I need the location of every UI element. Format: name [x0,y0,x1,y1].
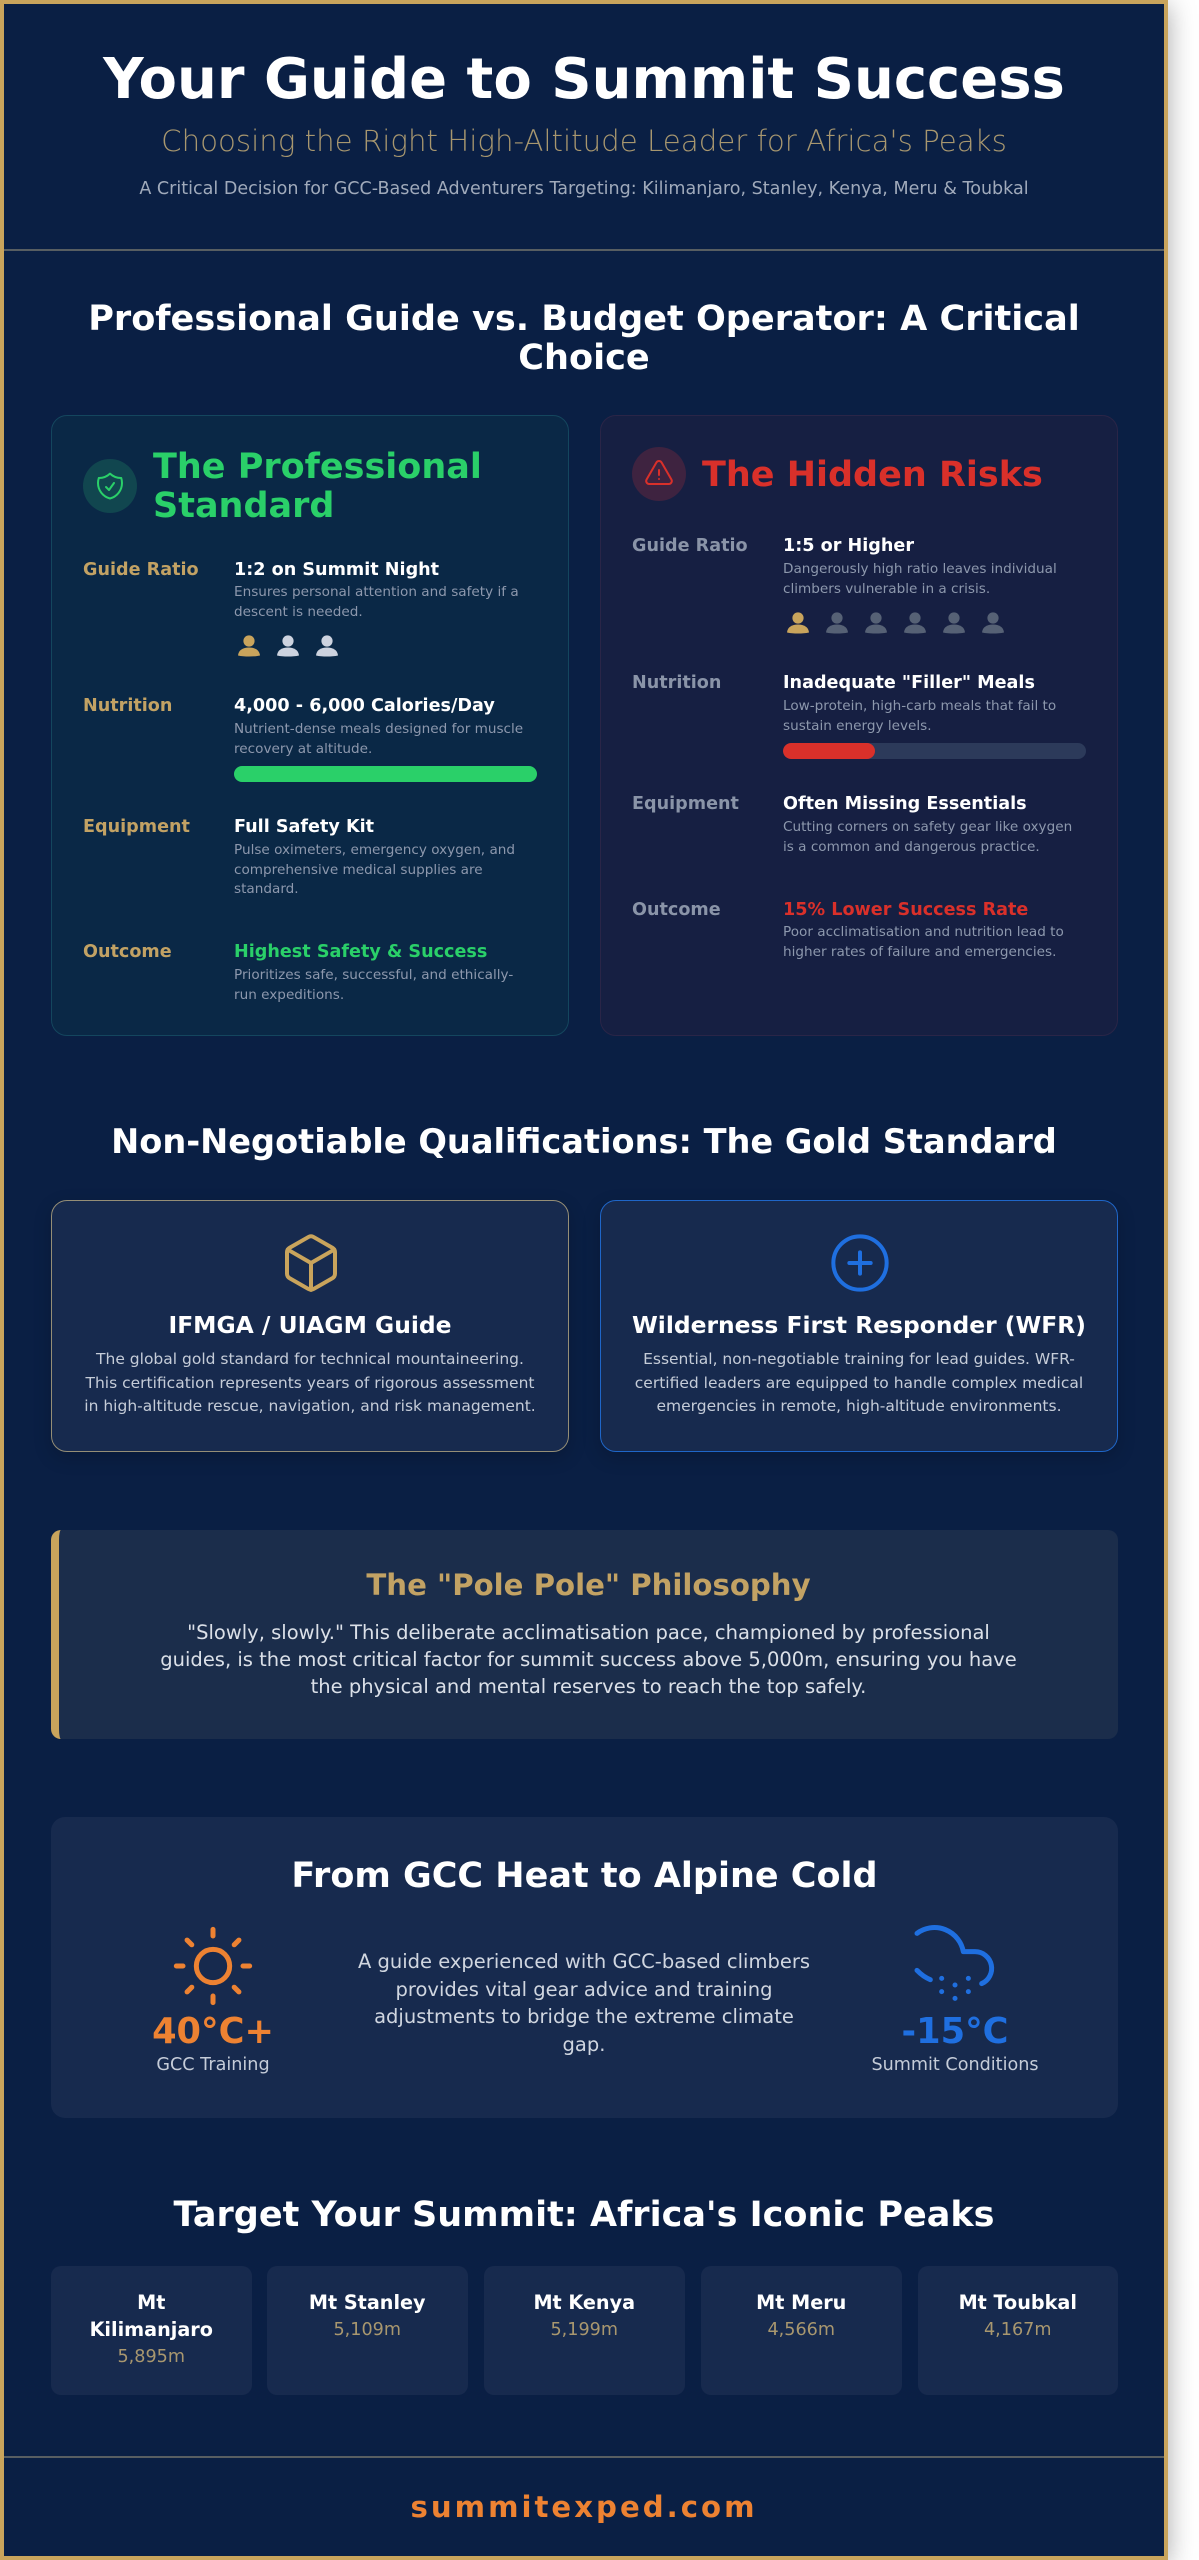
nutrition bar [783,743,1086,759]
callout: pole pole philosophy [51,1530,1118,1739]
peak name: Mt Stanley [309,2291,426,2314]
panel: the hidden risks [600,415,1118,1036]
card: IFMGA guide [51,1200,569,1452]
heading: comparison [88,298,1080,378]
peak elevation: 5,109m [333,2320,401,2340]
row: nutrition description: Nutrient-dense meals designed for muscle [234,721,523,737]
row: guide ratio description: Dangerously high ratio leaves individual [783,561,1057,577]
row: equipment description [234,842,515,897]
row: equipment description [783,819,1072,855]
professional title: Standard [153,486,334,526]
callout text: guides, is the most critical factor for summit success above 5,000m, ensuring you have [160,1648,1017,1671]
hot caption: GCC Training [156,2055,270,2075]
climate text: A guide experienced with GCC-based climbers [358,1950,810,1973]
icon: sun [174,1926,252,2006]
row: nutrition description: sustain energy levels. [783,718,932,734]
row: outcome description [783,924,1064,960]
row: equipment value: Full Safety Kit [234,817,374,837]
row: outcome description: Poor acclimatisation and nutrition lead to [783,924,1064,940]
header [102,47,1065,199]
callout title: The "Pole Pole" Philosophy [366,1568,811,1602]
risks title: The Hidden Risks [702,455,1043,495]
nutrition bar [234,766,537,782]
icon: snow cloud [914,1925,994,2001]
certificate description [635,1350,1083,1415]
row: guide ratio description [783,561,1057,597]
certificate description: This certification represents years of rigorous assessment [86,1374,534,1392]
peak name: Mt Kenya [533,2291,635,2314]
climate heading: From GCC Heat to Alpine Cold [291,1856,878,1896]
row: guide ratio description: Ensures personal attention and safety if a [234,584,519,600]
climate text: adjustments to bridge the extreme climate [374,2005,794,2028]
peak: kilimanjaro [51,2266,252,2395]
peak elevation: 4,167m [984,2320,1052,2340]
hot temperature: 40°C+ [152,2011,274,2052]
professional title: The Professional [153,447,482,487]
certificate title: Wilderness First Responder (WFR) [632,1311,1086,1339]
row: outcome description: Prioritizes safe, successful, and ethically- [234,967,513,983]
peak elevation: 5,895m [117,2347,185,2367]
row: nutrition description: recovery at altitude. [234,741,372,757]
peak name [90,2291,213,2341]
tagline: A Critical Decision for GCC-Based Adventurers Targeting: Kilimanjaro, Stanley, Kenya, Meru & Toubkal [139,179,1029,199]
row: outcome value: 15% Lower Success Rate [783,900,1028,920]
row: nutrition label: Nutrition [83,696,172,716]
row: guide ratio description: climbers vulnerable in a crisis. [783,581,990,597]
row: nutrition value: Inadequate "Filler" Meals [783,673,1035,693]
peak elevation: 5,199m [550,2320,618,2340]
icon: guide and five climbers [787,612,1004,634]
callout text: the physical and mental reserves to reach the top safely. [311,1675,866,1698]
row: guide ratio description: descent is needed. [234,604,363,620]
icon: warning triangle [632,447,686,501]
row: equipment description: Cutting corners on safety gear like oxygen [783,819,1072,835]
row: guide ratio label: Guide Ratio [632,536,748,556]
heading: qualifications: Non-Negotiable Qualifications: The Gold Standard [111,1122,1057,1161]
climate text: provides vital gear advice and training [396,1978,772,2000]
peak: meru [701,2266,902,2395]
row: nutrition description [234,721,523,757]
risks panel content [632,447,1086,960]
row: nutrition value: 4,000 - 6,000 Calories/Day [234,696,495,716]
cold temperature: -15°C [902,2011,1008,2052]
certificate description: Essential, non-negotiable training for lead guides. WFR- [643,1350,1075,1368]
row: equipment value: Often Missing Essentials [783,794,1027,814]
peak: toubkal [918,2266,1118,2395]
row: nutrition description: Low-protein, high-carb meals that fail to [783,698,1056,714]
peak: kenya [484,2266,684,2395]
callout text: "Slowly, slowly." This deliberate acclimatisation pace, championed by professional [187,1621,990,1644]
row: guide ratio value: 1:5 or Higher [783,536,914,556]
row: equipment description: is a common and dangerous practice. [783,839,1040,855]
peak: stanley [267,2266,468,2395]
row: guide ratio description [234,584,519,620]
professional title [153,447,482,526]
row: outcome label: Outcome [83,942,172,962]
heading: comparison: Professional Guide vs. Budget Operator: A Critical [88,298,1080,339]
row: guide ratio value: 1:2 on Summit Night [234,560,439,580]
row: equipment label: Equipment [632,794,739,814]
peak name: Mt Toubkal [959,2291,1077,2314]
certificate title: IFMGA / UIAGM Guide [168,1311,451,1339]
cold caption: Summit Conditions [871,2055,1039,2075]
panel: climate bridge [51,1817,1118,2118]
certificate description [84,1350,536,1415]
row: nutrition label: Nutrition [632,673,721,693]
climate text: gap. [563,2032,605,2056]
climate text [358,1950,810,2056]
title: Your Guide to Summit Success [103,47,1065,112]
row: outcome description: run expeditions. [234,987,344,1003]
icon: plus circle [831,1234,889,1292]
footer: website: summitexped.com [410,2490,758,2524]
subtitle: Choosing the Right High-Altitude Leader for Africa's Peaks [161,124,1007,158]
icon: shield check [83,459,137,513]
card: wilderness first responder [600,1200,1118,1452]
row: outcome description: higher rates of failure and emergencies. [783,944,1056,960]
row: equipment description: standard. [234,881,299,897]
icon: cube [285,1234,337,1292]
row: nutrition description [783,698,1056,734]
peak name: Mt [137,2291,165,2314]
heading: peaks: Target Your Summit: Africa's Iconic Peaks [174,2195,994,2235]
heading: comparison: Choice [518,337,650,378]
peak elevation: 4,566m [767,2320,835,2340]
certificate description: emergencies in remote, high-altitude environments. [656,1397,1062,1415]
certificate description: in high-altitude rescue, navigation, and risk management. [84,1397,536,1415]
row: equipment label: Equipment [83,817,190,837]
peak name: Mt Meru [756,2291,846,2314]
row: outcome value: Highest Safety & Success [234,942,487,962]
row: outcome description [234,967,513,1003]
certificate description: The global gold standard for technical mountaineering. [96,1350,524,1368]
row: outcome label: Outcome [632,900,721,920]
peak name: Kilimanjaro [90,2318,213,2341]
callout text [160,1621,1017,1698]
climate panel content [152,1856,1039,2075]
row: equipment description: comprehensive medical supplies are [234,862,483,878]
row: guide ratio label: Guide Ratio [83,560,199,580]
professional panel content [83,447,537,1003]
icon: guide and two climbers [238,635,338,656]
row: equipment description: Pulse oximeters, emergency oxygen, and [234,842,515,858]
panel: the professional standard [51,415,569,1036]
certificate description: certified leaders are equipped to handle complex medical [635,1374,1083,1392]
